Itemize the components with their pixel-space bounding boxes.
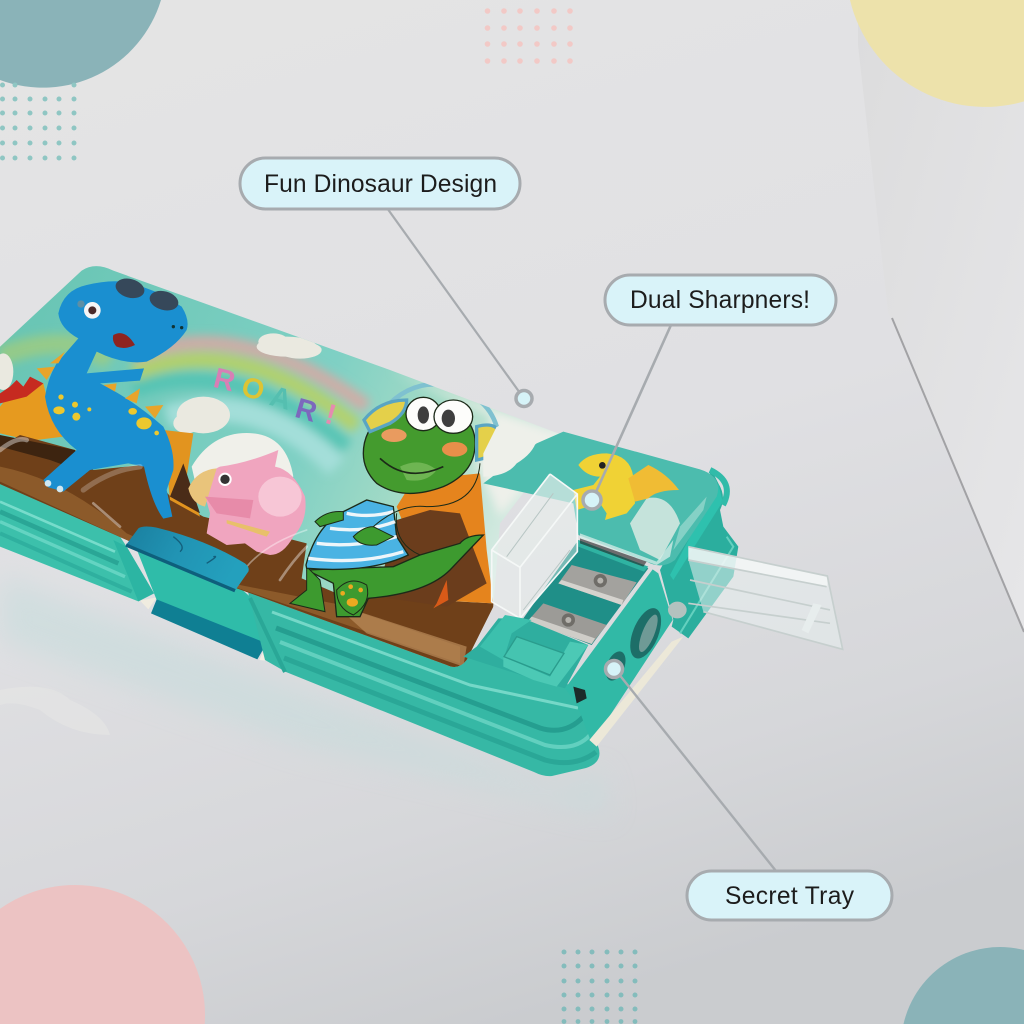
decorative circle: teal top left — [0, 0, 161, 88]
ROAR lettering: O — [238, 371, 268, 407]
ear cups — [364, 400, 407, 432]
marker dot — [516, 390, 532, 406]
ROAR lettering: R — [292, 392, 321, 429]
blue t-rex with sunglasses — [37, 276, 188, 519]
decorative circle: pink bottom left — [0, 885, 205, 1024]
callout: Fun Dinosaur Design — [240, 158, 532, 406]
wall edge — [892, 318, 1024, 632]
slide button — [504, 637, 564, 675]
marker dot — [583, 491, 601, 509]
sharpener blade 2 — [527, 603, 607, 644]
ROAR lettering: R — [210, 362, 239, 398]
label text: Dual Sharpners! — [630, 287, 810, 314]
rear end body — [660, 470, 738, 638]
white egg shell behind pink dino — [192, 433, 294, 479]
ROAR lettering — [214, 368, 336, 424]
label text: Fun Dinosaur Design — [264, 171, 497, 198]
cream base sliver — [140, 597, 157, 609]
lid background sky — [0, 266, 537, 667]
yellow flying dinosaur — [573, 453, 679, 520]
box front wall: middle hinge section — [135, 545, 283, 663]
ROAR lettering: A — [266, 380, 295, 417]
screws — [594, 574, 607, 587]
callout: Secret Tray — [606, 660, 892, 920]
rainbow — [0, 343, 367, 467]
decorative circle: yellow top right — [850, 0, 1024, 107]
label pill — [687, 871, 892, 920]
sharpener compartment floor — [523, 540, 648, 645]
tail and body — [307, 535, 483, 617]
clear flip lid — [492, 474, 577, 618]
smile — [380, 458, 443, 473]
clear sliding tray — [688, 547, 843, 649]
cream base strip — [589, 637, 683, 747]
box end: compartment and sharpeners — [463, 427, 843, 747]
dot grid: pink top — [485, 8, 573, 64]
green frog-eyed dinosaur — [290, 384, 502, 617]
white glare beside frog — [406, 377, 558, 515]
headphones band — [383, 384, 497, 427]
decorative circle: teal bottom right — [904, 947, 1024, 1024]
lid illustration — [0, 257, 580, 673]
ground — [0, 435, 493, 673]
leader line — [387, 208, 520, 393]
clouds — [0, 333, 322, 433]
leader line — [596, 325, 671, 492]
slide button platform — [463, 618, 588, 688]
blue metallic clasp — [126, 526, 249, 591]
cloud left of cap — [483, 427, 537, 477]
label pill — [605, 275, 836, 325]
end face with holes — [565, 569, 673, 743]
cap panel with yellow dinosaur — [483, 432, 718, 565]
ROAR lettering: ! — [322, 398, 340, 432]
label text: Secret Tray — [725, 883, 855, 910]
cream corner — [259, 644, 283, 663]
sharpener blade 1 — [558, 565, 637, 605]
headphone cord — [373, 463, 480, 555]
leader line — [618, 673, 776, 871]
dot grid: teal top left — [0, 82, 76, 160]
plastic glare streaks — [0, 439, 307, 580]
front wall ridges — [250, 598, 596, 763]
floor smudge — [0, 687, 110, 735]
small volcano left — [163, 430, 200, 517]
screw on rear — [668, 602, 687, 618]
foot pad — [337, 581, 368, 615]
eyes — [406, 397, 441, 431]
label pill — [240, 158, 520, 209]
callout: Dual Sharpners! — [583, 275, 836, 509]
product: dinosaur pencil box — [0, 257, 843, 776]
reflected glow under the pencil box — [0, 575, 610, 815]
dark blue hinge strip — [151, 599, 267, 659]
pink triceratops — [188, 450, 306, 555]
box front wall: left section — [0, 477, 157, 609]
striped shirt — [306, 500, 408, 569]
dot grid: teal bottom — [562, 950, 638, 1024]
rear right wall edge highlight — [710, 470, 727, 505]
marker dot — [606, 660, 622, 678]
background wall block — [858, 0, 1024, 632]
head — [363, 410, 475, 493]
cheeks — [381, 429, 407, 442]
big volcano behind frog — [397, 473, 493, 603]
arms — [315, 511, 343, 527]
left orange dinosaur — [0, 383, 63, 440]
box front wall: right section — [245, 580, 600, 776]
